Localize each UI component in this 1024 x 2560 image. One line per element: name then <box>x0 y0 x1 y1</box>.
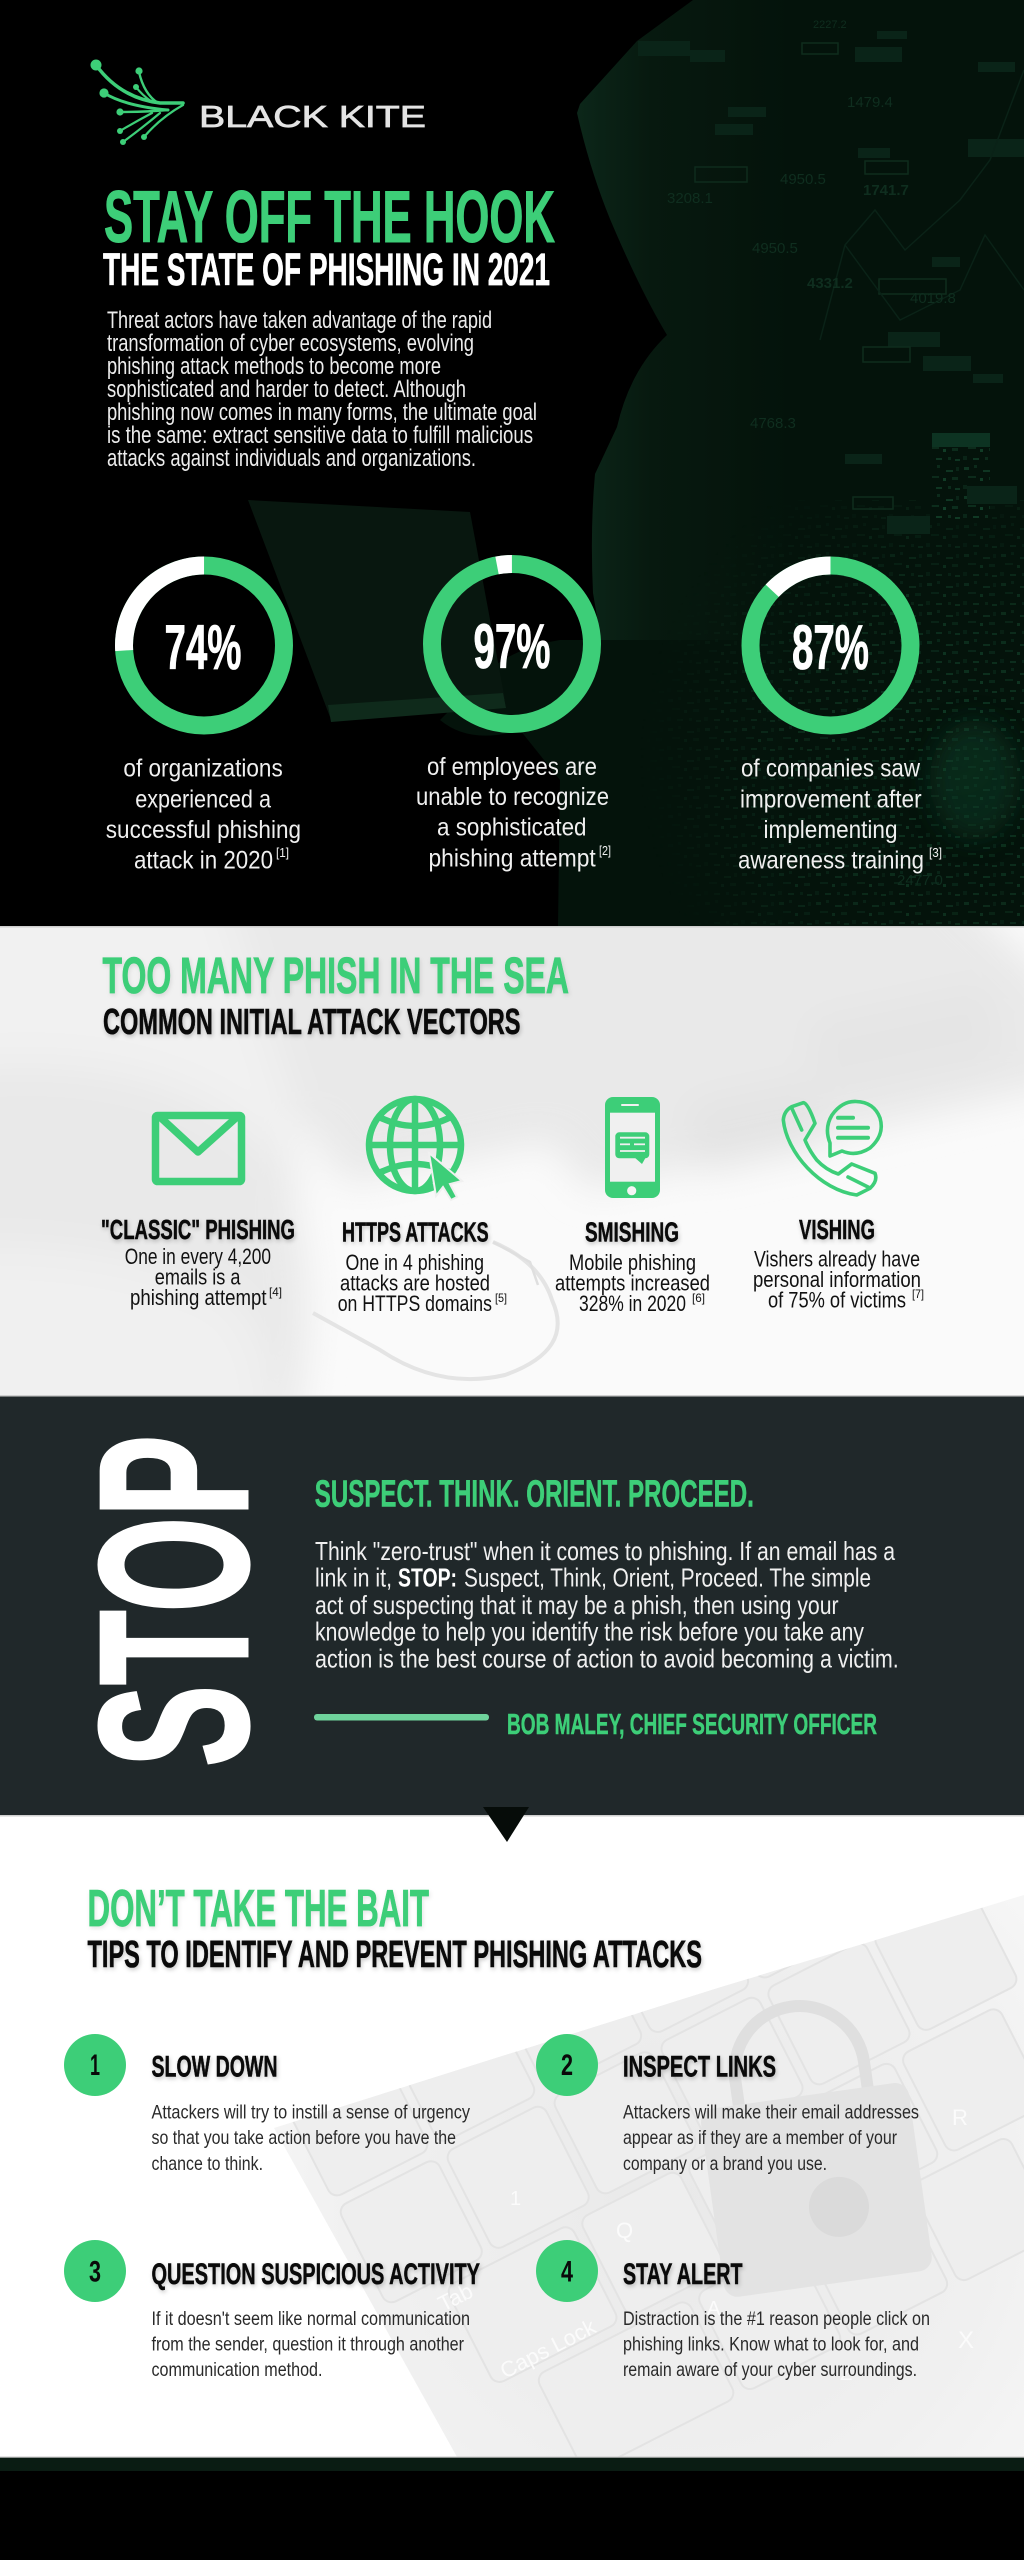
panel: STOP quote <box>0 1395 1024 1815</box>
intro paragraph: phishing now comes in many forms, the ultimate goal <box>107 399 537 426</box>
attribution line <box>314 1714 489 1720</box>
background image: keyboard with padlock: Caps Lock <box>496 2314 601 2383</box>
quote paragraph: link in it, <box>315 1563 392 1593</box>
panel: common attack vectors <box>0 926 1024 1395</box>
tip text 2 <box>623 2102 919 2175</box>
background image: hooded hacker <box>248 0 1024 926</box>
tip text 4 <box>623 2308 930 2381</box>
caption 87%: of companies saw <box>741 755 921 783</box>
description: HTTPS attacks: attacks are hosted <box>340 1271 490 1296</box>
description: HTTPS attacks: on HTTPS domains <box>338 1291 492 1316</box>
label: classic phishing: "CLASSIC" PHISHING <box>101 1214 295 1245</box>
value 97%: 97% <box>474 612 550 682</box>
tip text 2: appear as if they are a member of your <box>623 2127 897 2149</box>
caption 97% <box>416 753 611 873</box>
heading: DON’T TAKE THE BAIT <box>88 1880 429 1938</box>
quote paragraph: STOP: <box>398 1563 457 1593</box>
quote paragraph: action is the best course of action to avoid becoming a victim. <box>315 1644 899 1674</box>
description: classic phishing: phishing attempt <box>130 1285 266 1310</box>
quote paragraph: Think "zero-trust" when it comes to phishing. If an email has a <box>315 1536 895 1566</box>
heading: suspect think orient proceed: SUSPECT. THINK. ORIENT. PROCEED. <box>315 1474 754 1516</box>
background image: keyboard with padlock: R <box>952 2105 968 2130</box>
description: vishing: of 75% of victims <box>768 1287 906 1312</box>
number badge 3 <box>64 2240 126 2302</box>
number badge 3: 3 <box>89 2256 101 2289</box>
number badge 2 <box>536 2034 598 2096</box>
tip text 3 <box>152 2308 470 2381</box>
icon: envelope <box>156 1116 242 1182</box>
stat: 97% <box>416 550 611 873</box>
caption 87% <box>738 755 942 874</box>
footer band <box>0 2456 1024 2560</box>
intro paragraph: phishing attack methods to become more <box>107 353 441 380</box>
donut chart 74% <box>119 561 289 730</box>
intro paragraph: Threat actors have taken advantage of the rapid <box>107 307 492 334</box>
description: HTTPS attacks: [5] <box>495 1291 507 1305</box>
description: vishing: Vishers already have <box>754 1247 920 1272</box>
description: vishing <box>753 1247 924 1312</box>
background image: hooded hacker: 2477.0 <box>897 872 943 889</box>
vector: HTTPS attacks <box>338 1099 507 1316</box>
tip title 1: SLOW DOWN <box>152 2051 278 2084</box>
background image: hand, hook and keyboard <box>0 928 1024 1395</box>
caption 74%: attack in 2020 <box>134 846 273 874</box>
description: HTTPS attacks <box>338 1250 507 1316</box>
background image: hooded hacker: 2227.2 <box>813 19 847 31</box>
caption 87%: [3] <box>929 845 942 860</box>
intro paragraph <box>107 307 537 472</box>
background image: hooded hacker: 3208.1 <box>667 190 713 207</box>
description: smishing: [6] <box>692 1291 705 1305</box>
tip text 4: remain aware of your cyber surroundings. <box>623 2359 917 2381</box>
label: HTTPS attacks: HTTPS ATTACKS <box>342 1217 489 1248</box>
quote paragraph: knowledge to help you identify the risk before you take any <box>315 1617 864 1647</box>
logo: Black Kite <box>90 60 426 145</box>
tip text 4: Distraction is the #1 reason people click on <box>623 2308 930 2330</box>
title: STAY OFF THE HOOK <box>104 177 555 258</box>
description: classic phishing: [4] <box>269 1285 282 1299</box>
caption 97%: a sophisticated <box>437 814 586 842</box>
number badge 1 <box>64 2034 126 2096</box>
caption 74% <box>106 755 301 874</box>
tip text 3: If it doesn't seem like normal communication <box>152 2308 470 2330</box>
caption 87%: awareness training <box>738 846 924 874</box>
number badge 4 <box>536 2240 598 2302</box>
description: classic phishing <box>125 1244 282 1310</box>
arrow: down-pointing connector <box>483 1807 529 1842</box>
number badge 1: 1 <box>90 2049 100 2082</box>
vector: vishing <box>753 1101 924 1312</box>
background image: hooded hacker: 1741.7 <box>863 182 909 199</box>
tip 1: slow down <box>64 2034 470 2175</box>
stat: 87% <box>717 532 944 874</box>
subheading: COMMON INITIAL ATTACK VECTORS <box>103 1001 520 1042</box>
quote paragraph <box>315 1536 899 1674</box>
logo wordmark: BLACK KITE <box>199 100 426 134</box>
quote paragraph: act of suspecting that it may be a phish, then using your <box>315 1590 839 1620</box>
caption 97%: of employees are <box>427 753 597 781</box>
caption 74%: experienced a <box>135 785 271 813</box>
tip title 3: QUESTION SUSPICIOUS ACTIVITY <box>152 2258 480 2291</box>
vector: classic phishing <box>101 1116 295 1310</box>
caption 74%: [1] <box>276 845 289 860</box>
label: vishing: VISHING <box>799 1214 875 1245</box>
icon: telephone handset and speech bubble <box>783 1101 881 1195</box>
quote paragraph: Suspect, Think, Orient, Proceed. The simple <box>464 1563 871 1593</box>
panel: tips <box>0 1815 1024 2456</box>
description: smishing: Mobile phishing <box>569 1250 696 1275</box>
tip text 2: Attackers will make their email addresses <box>623 2102 919 2124</box>
number badge 2: 2 <box>561 2049 573 2082</box>
intro paragraph: attacks against individuals and organizations. <box>107 445 476 472</box>
tip text 4: phishing links. Know what to look for, and <box>623 2334 919 2356</box>
label: smishing: SMISHING <box>585 1217 679 1248</box>
heading: TOO MANY PHISH IN THE SEA <box>102 947 569 1004</box>
description: HTTPS attacks: One in 4 phishing <box>346 1250 484 1275</box>
tip text 1: chance to think. <box>152 2153 263 2175</box>
caption 74%: successful phishing <box>106 816 301 844</box>
description: vishing: personal information <box>753 1267 921 1292</box>
donut chart 87% <box>717 532 944 759</box>
background image: hooded hacker: 4950.5 <box>752 240 798 257</box>
caption 87%: improvement after <box>740 785 922 813</box>
background image: keyboard with padlock: Tab <box>434 2278 477 2316</box>
caption 87%: implementing <box>764 816 898 844</box>
number badge 4: 4 <box>561 2256 573 2289</box>
caption 97%: phishing attempt <box>428 845 596 873</box>
vertical word STOP: STOP <box>55 1435 292 1767</box>
description: smishing: 328% in 2020 <box>579 1291 686 1316</box>
tip 2: inspect links <box>536 2034 919 2175</box>
intro paragraph: sophisticated and harder to detect. Although <box>107 376 466 403</box>
background image: keyboard with padlock: X <box>958 2327 974 2354</box>
vector: smishing <box>555 1097 710 1316</box>
background image: keyboard with padlock: 1 <box>510 2188 521 2210</box>
caption 74%: of organizations <box>123 755 283 783</box>
background image: keyboard with padlock: Q <box>616 2218 633 2243</box>
tip text 1: so that you take action before you have the <box>152 2127 456 2149</box>
background image: hooded hacker: 4331.2 <box>807 275 853 292</box>
description: smishing: attempts increased <box>555 1271 710 1296</box>
description: classic phishing: One in every 4,200 <box>125 1244 271 1269</box>
tip 4: stay alert <box>536 2240 930 2381</box>
value 74%: 74% <box>164 613 242 683</box>
description: smishing <box>555 1250 710 1316</box>
tip 3: question suspicious activity <box>64 2240 480 2381</box>
caption 97%: unable to recognize <box>416 783 609 811</box>
background image: hooded hacker: 4019.8 <box>910 290 956 307</box>
background image: hooded hacker: 4950.5 <box>780 171 826 188</box>
tip title 2: INSPECT LINKS <box>623 2051 776 2084</box>
tip text 3: from the sender, question it through another <box>152 2334 464 2356</box>
donut chart 97% <box>418 550 606 738</box>
icon: globe with cursor <box>369 1099 462 1200</box>
description: vishing: [7] <box>912 1287 924 1301</box>
tip title 4: STAY ALERT <box>623 2258 743 2291</box>
tip text 3: communication method. <box>152 2359 322 2381</box>
background image: hooded hacker: 4768.3 <box>750 415 796 432</box>
background image: hooded hacker: 1479.4 <box>847 94 893 111</box>
icon: smartphone with message <box>605 1097 660 1198</box>
background image: keyboard with padlock: Z <box>840 2363 852 2385</box>
tip text 1 <box>152 2102 470 2175</box>
value 87%: 87% <box>792 613 869 683</box>
intro paragraph: transformation of cyber ecosystems, evolving <box>107 330 474 357</box>
panel: hero header <box>0 0 1024 926</box>
background image: keyboard with padlock <box>274 1896 1024 2456</box>
intro paragraph: is the same: extract sensitive data to fulfill malicious <box>107 422 533 449</box>
background image: keyboard with padlock: A <box>707 2298 721 2320</box>
tip text 1: Attackers will try to instill a sense of urgency <box>152 2102 470 2124</box>
stat: 74% <box>106 561 301 874</box>
tip text 2: company or a brand you use. <box>623 2153 827 2175</box>
subtitle: THE STATE OF PHISHING IN 2021 <box>103 244 550 295</box>
description: classic phishing: emails is a <box>155 1265 241 1290</box>
caption 97%: [2] <box>599 843 611 858</box>
